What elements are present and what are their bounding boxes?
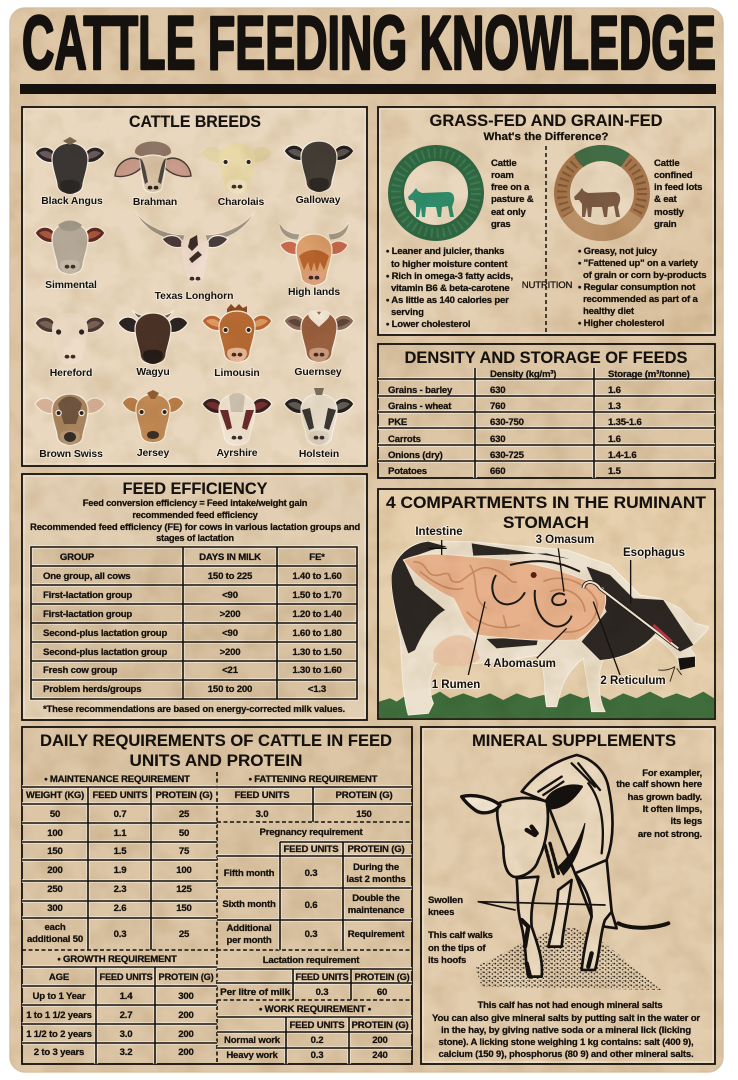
table: feed efficiency: Problem herds/groups [43,684,141,695]
table: feed efficiency: First-lactation group [43,609,132,620]
table: feeds: Storage (m³/tonne) [608,369,690,380]
table: feed efficiency: First-lactation group [43,590,132,601]
text: grain-fed description: confined [654,170,693,181]
illustration: calf [462,755,668,990]
table: growth requirement: 200 [178,1029,194,1040]
text: grass-fed description: roam [491,170,514,181]
table: feeds: 630-725 [490,450,525,461]
label: 3 Omasum: 3 Omasum [536,534,594,546]
text: grass-fed nutrition: • Leaner and juicier, thanks [386,246,504,257]
table: pregnancy requirement: 0.3 [305,868,317,879]
label: Charolais: Charolais [218,197,265,208]
table: growth requirement: 2.7 [120,1010,132,1021]
table: pregnancy requirement: Sixth month [222,899,276,910]
text: calf observations: its legs [671,816,702,827]
table: feed efficiency: 1.20 to 1.40 [292,609,342,620]
table: feeds [378,368,715,478]
table: feed efficiency: Fresh cow group [43,665,118,676]
table: feed efficiency: <21 [222,665,239,676]
table: pregnancy requirement [217,842,412,950]
table: growth requirement: PROTEIN (G) [158,972,214,983]
table: maintenance requirement: 50 [50,809,60,820]
icon: Galloway [284,141,354,192]
table: maintenance requirement: 1.9 [114,865,126,876]
icon: Texas Longhorn [135,211,255,282]
subheading: What's the Difference? [484,131,609,143]
text: grain-fed description: & eat [654,194,677,205]
panel: mineral supplements [421,727,715,1064]
table: lactation requirement: 60 [377,987,387,998]
table: feeds: 760 [490,401,505,412]
icon: Ayrshire [202,393,272,445]
table: growth requirement: 200 [178,1010,194,1021]
table: pregnancy requirement: Requirement [348,929,405,940]
table: feeds: 660 [490,466,505,477]
table: lactation requirement: 0.3 [316,987,328,998]
text: grain-fed description: grain [654,219,677,230]
text: calf observations: has grown badly. [628,792,702,803]
icon: Wagyu [118,311,188,364]
text: grass-fed description: free on a [491,182,530,193]
text: calf observations: For exampler, [642,768,703,779]
table: pregnancy requirement: FEED UNITS [283,844,339,855]
table: feed efficiency [31,547,357,699]
table: feeds: Grains - barley [388,385,453,396]
divider: dashed center [216,772,218,1064]
text: definition: Feed conversion efficiency = Feed intake/weight gain [83,498,308,508]
icon: Charolais [202,143,272,194]
divider [545,146,547,332]
table: fattening requirement [217,787,412,822]
table: work requirement: 0.2 [311,1035,323,1046]
table: pregnancy requirement: 0.6 [305,900,317,911]
table: growth requirement [22,967,217,1064]
heading: daily requirements: DAILY REQUIREMENTS OF CATTLE IN FEED [40,731,392,750]
table: maintenance requirement: 250 [47,884,63,895]
table: maintenance requirement: 100 [47,828,63,839]
table: growth requirement: Up to 1 Year [33,991,86,1002]
table: growth requirement: 300 [178,991,194,1002]
table: pregnancy requirement: per month [226,935,272,946]
table: feeds: PKE [388,417,408,428]
table: feed efficiency: 1.60 to 1.80 [292,628,342,639]
table: maintenance requirement: 100 [176,865,192,876]
table: maintenance requirement: 50 [179,828,189,839]
label: walks on hoof tips: on the tips of [428,943,486,954]
table: maintenance requirement: additional 50 [27,934,83,945]
table: work requirement: PROTEIN (G) [352,1020,408,1031]
text: grain-fed description: mostly [654,207,685,218]
text: grain-fed nutrition: of grain or corn by-products [583,270,706,281]
table: pregnancy requirement: Additional [227,923,271,934]
table: lactation requirement: Per litre of milk [220,987,291,998]
table: growth requirement: 1.4 [120,991,133,1002]
panel: feed efficiency [22,474,367,720]
label: swollen knees: Swollen [428,895,463,906]
table: maintenance requirement: 150 [47,846,63,857]
table: feed efficiency: >200 [220,609,240,620]
table: feed efficiency: <90 [222,590,238,601]
text: grass-fed description [491,158,534,230]
text: definition: recommended feed efficiency [132,510,259,520]
table: maintenance requirement: 2.6 [114,903,126,914]
icon: Jersey [122,390,184,443]
table: growth requirement: 1 1/2 to 2 years [26,1029,92,1040]
table: feed efficiency: >200 [220,647,240,658]
table: maintenance requirement: 300 [47,903,63,914]
table: feed efficiency: Second-plus lactation group [43,628,167,639]
table: work requirement: Heavy work [226,1050,279,1061]
label: High lands: High lands [288,287,340,298]
text: calf observations [616,768,703,840]
text: grain-fed nutrition: • Greasy, not juicy [578,246,658,257]
icon: Brown Swiss [35,394,105,445]
table: feed efficiency: <90 [222,628,238,639]
text: calf observations: the calf shown here [616,779,702,790]
text: grass-fed nutrition: to higher moisture content [391,259,508,270]
text: grass-fed nutrition [386,246,513,330]
label: swollen knees [428,895,463,918]
table: lactation requirement [217,969,412,1000]
label: 4 Abomasum: 4 Abomasum [484,658,556,670]
table: feeds: 630-750 [490,417,524,428]
label: Hereford: Hereford [50,368,92,379]
table: work requirement: 200 [372,1035,388,1046]
table: growth requirement: 1 to 1 1/2 years [26,1010,92,1021]
table: feeds: 1.6 [608,434,621,445]
table: maintenance requirement: 1.1 [114,828,127,839]
text: mineral salts explanation: This calf has not had enough mineral salts [478,1000,662,1011]
table: maintenance requirement: 25 [179,929,190,940]
table: work requirement: Normal work [224,1035,281,1046]
icon: Brahman [115,142,191,192]
text: calf observations: It often limps, [643,804,703,815]
heading: mineral supplements: MINERAL SUPPLEMENTS [472,731,676,750]
table: maintenance requirement: 0.7 [114,809,126,820]
label: Holstein: Holstein [299,449,339,460]
label: 1 Rumen: 1 Rumen [432,679,480,691]
table: feed efficiency: Second-plus lactation group [43,647,167,658]
table: maintenance requirement: WEIGHT (KG) [26,790,84,801]
label: 2 Reticulum: 2 Reticulum [600,675,666,687]
icon: Simmental [35,220,105,274]
heading: feed efficiency: FEED EFFICIENCY [122,479,268,498]
table: maintenance requirement: 150 [176,903,192,914]
table: work requirement [217,1017,412,1064]
label: swollen knees: knees [428,907,454,918]
heading: ruminant stomach: STOMACH [503,513,589,532]
divider: dashed lower [22,949,412,951]
illustration: cow anatomy [379,540,714,718]
label: walks on hoof tips: This calf walks [428,930,493,941]
text: grass-fed description: eat only [491,207,527,218]
heading: fattening requirement: • FATTENING REQUIREMENT [249,774,378,785]
label: Simmental: Simmental [45,280,97,291]
table: work requirement: FEED UNITS [289,1020,345,1031]
text: grass-fed nutrition: serving [391,307,424,318]
table: pregnancy requirement: PROTEIN (G) [348,844,404,855]
table: feeds: Potatoes [388,466,427,477]
text: grain-fed description: Cattle [654,158,679,169]
label: Limousin: Limousin [214,368,260,379]
heading: pregnancy requirement: Pregnancy requirement [260,827,363,838]
heading: daily requirements: UNITS AND PROTEIN [130,751,302,770]
icon: grass ring with green cow [396,153,476,233]
table: fattening requirement: PROTEIN (G) [336,790,392,801]
icon: Highlands [279,222,349,285]
table: feeds: 1.6 [608,385,621,396]
text: definition: stages of lactation [156,533,234,543]
heading: maintenance requirement: • MAINTENANCE REQUIREMENT [44,774,190,785]
table: growth requirement: 3.2 [120,1047,132,1058]
table: maintenance requirement: 1.5 [114,846,127,857]
table: maintenance requirement: 25 [179,809,190,820]
text: grain-fed nutrition: • "Fattened up" on a variety [578,258,699,269]
label: Wagyu: Wagyu [136,367,170,378]
table: feeds: Density (kg/m³) [490,369,556,380]
table: work requirement: 0.3 [311,1050,323,1061]
text: definition [30,498,360,543]
icon: Black Angus [35,137,105,194]
heading: lactation requirement: Lactation requirement [263,955,360,966]
table: maintenance requirement: 0.3 [114,929,126,940]
table: feeds: 1.5 [608,466,622,477]
table: maintenance requirement: 2.3 [114,884,126,895]
heading: daily requirements [40,731,392,770]
label: Esophagus: Esophagus [623,547,685,559]
label: Texas Longhorn: Texas Longhorn [155,291,233,302]
table: pregnancy requirement: maintenance [348,905,404,916]
panel: ruminant stomach [378,489,715,719]
label: walks on hoof tips [428,930,493,966]
text: grain-fed nutrition [578,246,706,329]
table: maintenance requirement: 200 [47,865,63,876]
text: calf observations: are not strong. [638,829,702,840]
label: Black Angus: Black Angus [41,196,103,207]
table: maintenance requirement: 75 [179,846,190,857]
panel: cattle breeds [22,107,367,466]
title rule [20,84,716,94]
footnote: *These recommendations are based on energy-corrected milk values. [43,704,345,715]
text: grass-fed nutrition: • Lower cholesterol [386,319,470,330]
label: Galloway: Galloway [296,195,341,206]
table: fattening requirement: FEED UNITS [234,790,290,801]
table: feeds: Carrots [388,434,421,445]
table: maintenance requirement [22,787,217,950]
table: feed efficiency: 1.40 to 1.60 [292,571,342,582]
text: grain-fed nutrition: • Higher cholesterol [578,318,664,329]
heading: ruminant stomach: 4 COMPARTMENTS IN THE RUMINANT [386,493,707,512]
label: Jersey: Jersey [137,448,169,459]
text: mineral salts explanation: calcium (150 9), phosphorus (80 9) and other mineral salts. [438,1049,694,1060]
icon: grain ring with brown cow [546,137,658,249]
text: grass-fed nutrition: vitamin B6 & beta-carotene [391,283,510,294]
icon: Limousin [202,304,272,362]
table: feed efficiency: DAYS IN MILK [199,552,261,563]
label: Ayrshire: Ayrshire [217,448,258,459]
table: pregnancy requirement: During the [353,862,399,873]
label: Brown Swiss: Brown Swiss [39,449,103,460]
text: mineral salts explanation: in the hay, by giving native soda or a mineral lick (licking [441,1025,691,1036]
text: mineral salts explanation [432,1000,700,1060]
table: feed efficiency: <1.3 [308,684,326,695]
text: grain-fed nutrition: healthy diet [583,306,635,317]
label: Brahman: Brahman [133,197,177,208]
table: feed efficiency: 150 to 200 [208,684,252,695]
table: feeds: 1.4-1.6 [608,450,636,461]
heading: grass-fed and grain-fed: GRASS-FED AND GRAIN-FED [430,111,662,130]
table: feeds: 630 [490,385,505,396]
panel: grass-fed and grain-fed [378,107,715,335]
text: mineral salts explanation: You can also give mineral salts by putting salt in the water or [432,1013,700,1024]
icon: Hereford [35,313,105,364]
table: pregnancy requirement: Double the [352,893,400,904]
table: pregnancy requirement: Fifth month [224,868,275,879]
table: pregnancy requirement: 0.3 [305,929,317,940]
text: grass-fed description: pasture & [491,194,534,205]
heading: work requirement: • WORK REQUIREMENT • [259,1004,372,1015]
table: feed efficiency: 1.30 to 1.50 [292,647,342,658]
heading: growth requirement: • GROWTH REQUIREMENT [57,954,177,965]
text: grass-fed description: Cattle [491,158,516,169]
table: feeds: 1.35-1.6 [608,417,642,428]
text: grain-fed description [654,158,702,230]
table: feed efficiency: 1.30 to 1.60 [292,665,342,676]
heading: cattle breeds: CATTLE BREEDS [129,112,261,131]
text: grass-fed nutrition: • Rich in omega-3 fatty acids, [386,271,513,282]
label: Guernsey: Guernsey [294,367,342,378]
label: Intestine: Intestine [415,526,463,538]
text: grain-fed nutrition: recommended as part of a [583,294,698,305]
table: maintenance requirement: each [44,922,66,933]
table: maintenance requirement: PROTEIN (G) [156,790,212,801]
table: growth requirement: 200 [178,1047,194,1058]
table: feeds: Onions (dry) [388,450,443,461]
table: feeds: Grains - wheat [388,401,452,412]
table: feed efficiency: 150 to 225 [208,571,253,582]
table: fattening requirement: 3.0 [256,809,268,820]
text: grain-fed description: in feed lots [654,182,702,193]
table: fattening requirement: 150 [356,809,372,820]
table: feeds: 1.3 [608,401,621,412]
table: maintenance requirement: 125 [176,884,193,895]
table: growth requirement: 2 to 3 years [34,1047,84,1058]
text: grass-fed description: gras [491,219,510,230]
table: lactation requirement: PROTEIN (G) [354,972,410,983]
table: pregnancy requirement: last 2 months [346,874,406,885]
text: definition: Recommended feed efficiency (FE) for cows in various lactation groups and [30,522,360,533]
table: feed efficiency: GROUP [60,552,95,563]
table: maintenance requirement: FEED UNITS [92,790,148,801]
table: lactation requirement: FEED UNITS [296,972,349,983]
table: feed efficiency: One group, all cows [43,571,130,582]
table: work requirement: 240 [372,1050,388,1061]
text: mineral salts explanation: stone). A licking stone weighing 1 kg contains: salt (400 9), [438,1037,694,1048]
table: growth requirement: 3.0 [120,1029,132,1040]
text: grain-fed nutrition: • Regular consumption not [578,282,696,293]
icon: Holstein [284,388,354,445]
table: growth requirement: FEED UNITS [100,972,153,983]
table: feed efficiency: FE* [309,552,325,563]
table: feeds: 630 [490,434,505,445]
table: growth requirement: AGE [49,972,70,983]
icon: Guernsey [284,310,354,362]
table: feed efficiency: 1.50 to 1.70 [292,590,342,601]
heading: density and storage: DENSITY AND STORAGE OF FEEDS [404,348,688,367]
text: grass-fed nutrition: • As little as 140 calories per [386,295,509,306]
panel: density and storage of feeds [378,344,715,478]
label: nutrition: NUTRITION [522,280,572,291]
heading: ruminant stomach [386,493,707,532]
label: walks on hoof tips: its hoofs [428,955,466,966]
panel: daily requirements [22,727,412,1064]
